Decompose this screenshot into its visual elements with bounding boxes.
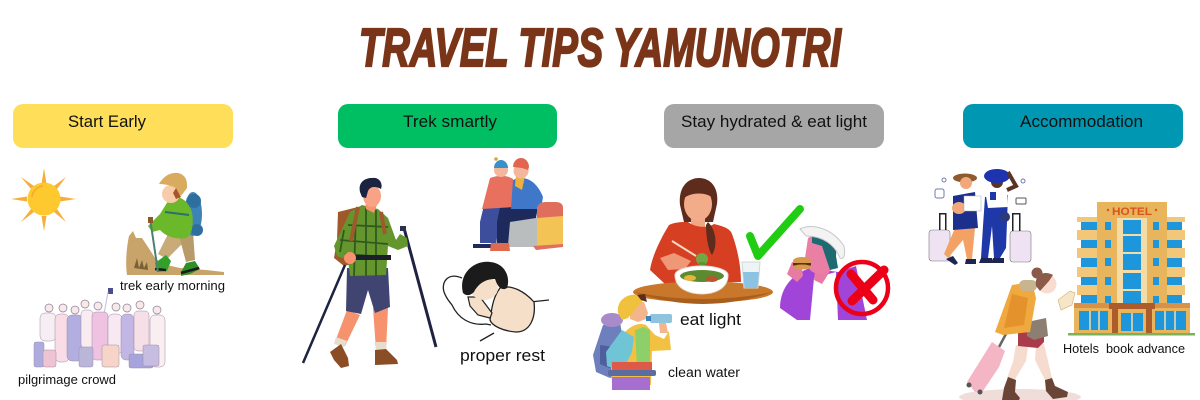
icon: sun xyxy=(11,168,76,231)
panel: accommodation xyxy=(929,104,1195,400)
illustration: couple resting xyxy=(473,157,563,251)
label: eat light: eat light xyxy=(680,311,741,329)
illustration: hotel building xyxy=(1068,202,1195,336)
illustration: two tourists with luggage xyxy=(929,169,1031,265)
heading: accommodation xyxy=(963,104,1183,148)
illustration: traveller with suitcase xyxy=(959,268,1081,400)
heading: start early: Start Early xyxy=(68,113,147,131)
illustration: hiker on hill xyxy=(126,173,224,276)
panel: stay hydrated and eat light xyxy=(593,104,888,390)
label: proper rest: proper rest xyxy=(460,347,545,365)
label: trek early morning: trek early morning xyxy=(120,278,225,293)
heading: start early xyxy=(13,104,233,148)
illustration: trekker with poles xyxy=(303,178,436,368)
illustration: trekker drinking water xyxy=(593,294,672,390)
panel: start early xyxy=(11,104,233,387)
illustration: pilgrimage crowd xyxy=(34,288,165,368)
illustration: woman eating salad xyxy=(633,178,773,304)
illustration: hotel building: HOTEL xyxy=(1112,206,1152,218)
illustration: sleeping person xyxy=(443,262,549,341)
title: TRAVEL TIPS YAMUNOTRI xyxy=(359,18,842,78)
heading: accommodation: Accommodation xyxy=(1020,113,1143,131)
label: pilgrimage crowd: pilgrimage crowd xyxy=(18,372,116,387)
label: hotels book advance: Hotels book advance xyxy=(1063,341,1185,356)
heading: stay hydrated: Stay hydrated & eat light xyxy=(681,113,867,131)
heading: stay hydrated xyxy=(664,104,884,148)
heading: trek smartly: Trek smartly xyxy=(403,113,498,131)
illustration: man eating burger xyxy=(780,227,867,320)
icon: red cross circle xyxy=(836,262,888,314)
label: clean water: clean water xyxy=(668,365,741,380)
heading: trek smartly xyxy=(338,104,557,148)
icon: green check mark xyxy=(750,209,800,256)
panel: trek smartly xyxy=(303,104,563,368)
